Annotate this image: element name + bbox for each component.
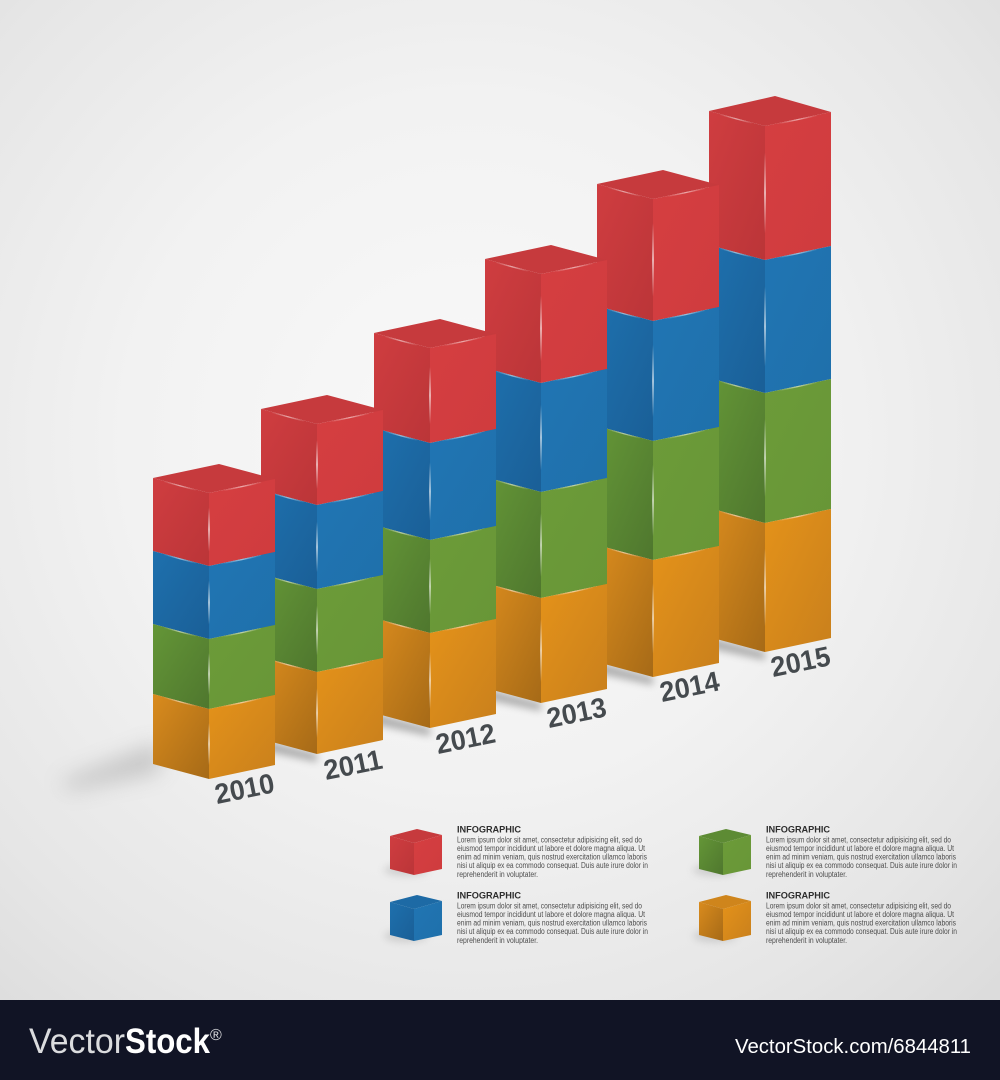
legend text: eiusmod tempor incididunt ut labore et dolore magna aliqua. Ut — [457, 844, 646, 853]
footer logo: Vector — [29, 1022, 125, 1061]
legend text: enim ad minim veniam, quis nostrud exercitation ullamco laboris — [457, 852, 647, 862]
legend text: reprehenderit in voluptater. — [457, 936, 538, 945]
footer logo — [29, 1022, 222, 1061]
legend text: reprehenderit in voluptater. — [766, 870, 847, 879]
year label: 2015: 2015 — [768, 641, 833, 683]
legend item: blue — [384, 890, 648, 945]
legend text — [457, 890, 648, 945]
year label: 2012: 2012 — [433, 718, 498, 760]
legend text: eiusmod tempor incididunt ut labore et dolore magna aliqua. Ut — [457, 910, 646, 919]
legend text: nisi ut aliquip ex ea commodo consequat. Duis aute irure dolor in — [457, 927, 648, 936]
legend text: enim ad minim veniam, quis nostrud exercitation ullamco laboris — [766, 918, 956, 928]
bar: 2012 — [374, 319, 496, 728]
icon: green cube — [693, 829, 751, 876]
legend item: green — [693, 824, 957, 879]
footer logo: Stock — [125, 1022, 210, 1061]
legend text: INFOGRAPHIC — [766, 824, 830, 834]
icon: blue cube — [384, 895, 442, 942]
legend text: nisi ut aliquip ex ea commodo consequat. Duis aute irure dolor in — [766, 861, 957, 870]
bar: 2013 — [485, 245, 607, 703]
legend text: Lorem ipsum dolor sit amet, consectetur adipisicing elit, sed do — [766, 836, 952, 844]
bar: 2011 — [261, 395, 383, 754]
year label: 2010: 2010 — [212, 768, 277, 810]
legend text: eiusmod tempor incididunt ut labore et dolore magna aliqua. Ut — [766, 910, 955, 919]
legend text: eiusmod tempor incididunt ut labore et dolore magna aliqua. Ut — [766, 844, 955, 853]
legend text — [766, 824, 957, 879]
bar: 2010 — [153, 464, 275, 779]
legend item: red — [384, 824, 648, 879]
footer band — [0, 1000, 1000, 1080]
floor shadows — [60, 637, 765, 790]
year label: 2011: 2011 — [321, 744, 385, 786]
bar: 2015 — [709, 96, 831, 652]
legend text: INFOGRAPHIC — [766, 890, 830, 900]
icon: red cube — [384, 829, 442, 876]
bar: 2014 — [597, 170, 719, 677]
legend text — [766, 890, 957, 945]
footer image id: VectorStock.com/6844811 — [735, 1036, 971, 1058]
legend text: nisi ut aliquip ex ea commodo consequat. Duis aute irure dolor in — [766, 927, 957, 936]
legend text: Lorem ipsum dolor sit amet, consectetur adipisicing elit, sed do — [457, 902, 643, 910]
legend text: enim ad minim veniam, quis nostrud exercitation ullamco laboris — [766, 852, 956, 862]
icon: orange cube — [693, 895, 751, 942]
legend item: orange — [693, 890, 957, 945]
legend text: nisi ut aliquip ex ea commodo consequat. Duis aute irure dolor in — [457, 861, 648, 870]
legend text — [457, 824, 648, 879]
legend text: INFOGRAPHIC — [457, 890, 521, 900]
legend text: enim ad minim veniam, quis nostrud exercitation ullamco laboris — [457, 918, 647, 928]
legend text: reprehenderit in voluptater. — [457, 870, 538, 879]
year label: 2013: 2013 — [544, 692, 609, 734]
legend text: reprehenderit in voluptater. — [766, 936, 847, 945]
legend text: Lorem ipsum dolor sit amet, consectetur adipisicing elit, sed do — [457, 836, 643, 844]
legend text: INFOGRAPHIC — [457, 824, 521, 834]
legend text: Lorem ipsum dolor sit amet, consectetur adipisicing elit, sed do — [766, 902, 952, 910]
year label: 2014: 2014 — [657, 665, 722, 708]
footer logo: ® — [210, 1027, 222, 1044]
